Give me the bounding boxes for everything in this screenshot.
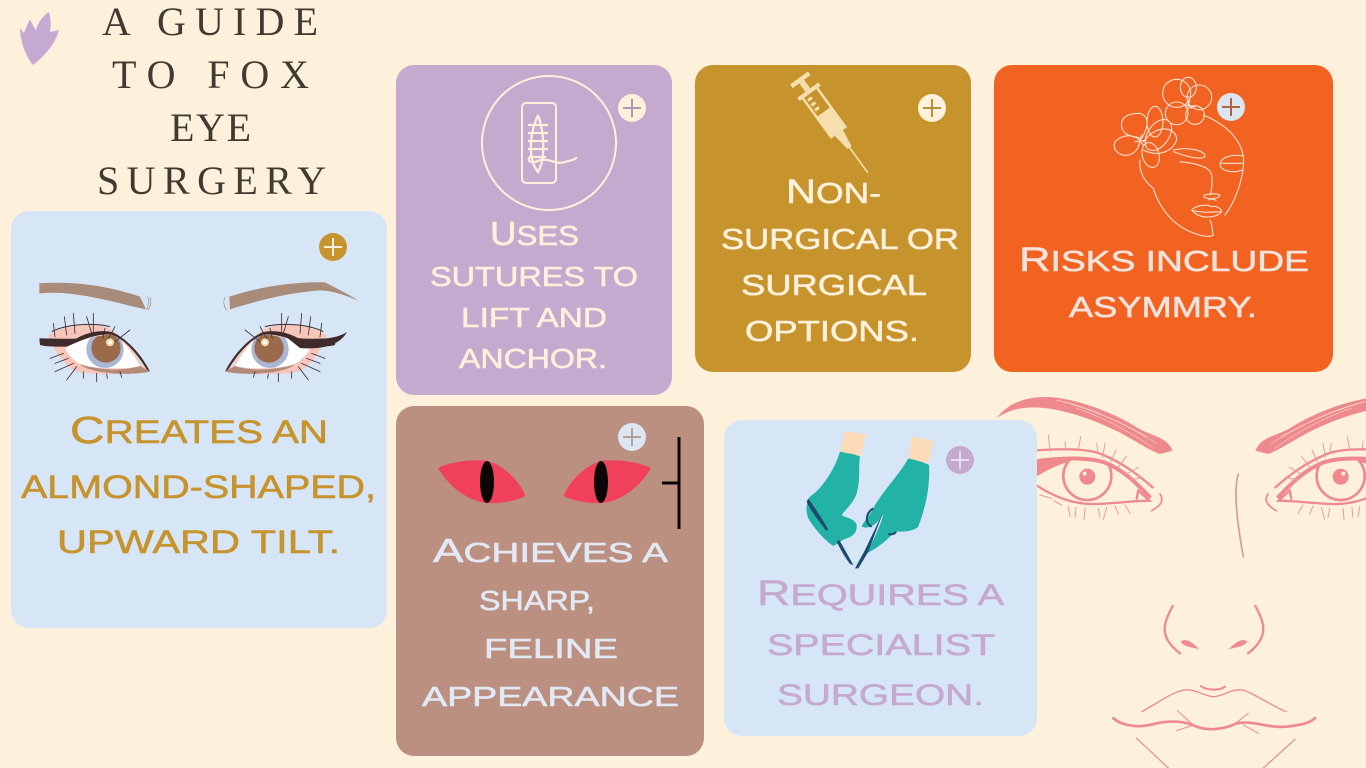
text: requires a specialist surgeon: SURGEON.: [777, 679, 984, 712]
title: SURGERY: [97, 158, 326, 203]
title: [97, 0, 326, 203]
text: uses sutures to lift and anchor: ANCHOR.: [459, 343, 607, 374]
text: requires a specialist surgeon: R EQUIRES A: [757, 574, 1004, 613]
title: EYE: [170, 105, 251, 150]
text: non-surgical or surgical options: OPTIONS.: [745, 316, 919, 348]
icon: plus button: [918, 94, 946, 122]
text: uses sutures to lift and anchor: [430, 215, 638, 374]
icon: plus button: [1217, 93, 1245, 121]
text: creates an almond-shaped, upward tilt: [21, 410, 376, 560]
text: achieves a sharp, feline appearance: SHARP,: [479, 585, 595, 616]
text: creates an almond-shaped, upward tilt: ALMOND-SHAPED,: [21, 469, 376, 505]
text: risks include asymmry: [1019, 241, 1309, 324]
panel: specialist surgeon: [724, 420, 1037, 736]
icon: red cat eyes: [438, 460, 651, 503]
text: achieves a sharp, feline appearance: APPEARANCE: [422, 681, 679, 712]
illustration: pair of eyes with winged liner: [39, 282, 358, 382]
text: achieves a sharp, feline appearance: A CHIEVES A: [433, 532, 668, 569]
panel: feline appearance: [396, 406, 704, 756]
illustration: pink line-art face: [997, 397, 1366, 768]
text: uses sutures to lift and anchor: LIFT AND: [461, 302, 607, 333]
icon: black bar mark: [662, 437, 679, 529]
panel: options: [695, 65, 971, 372]
text: non-surgical or surgical options: SURGICAL OR: [721, 224, 959, 256]
icon: syringe: [788, 70, 878, 180]
icon: gloved hands with instruments: [807, 432, 933, 568]
text: creates an almond-shaped, upward tilt: UPWARD TILT.: [57, 524, 340, 560]
text: requires a specialist surgeon: [757, 574, 1004, 712]
icon: plus button: [946, 446, 974, 474]
text: requires a specialist surgeon: SPECIALIST: [767, 629, 995, 662]
title: A GUIDE: [102, 0, 318, 44]
text: achieves a sharp, feline appearance: FELINE: [484, 633, 618, 664]
text: non-surgical or surgical options: SURGICAL: [741, 270, 927, 302]
icon: plus button: [319, 233, 347, 261]
icon: suture in circle: [482, 76, 616, 210]
text: achieves a sharp, feline appearance: [422, 532, 679, 712]
text: non-surgical or surgical options: NON-: [786, 173, 881, 211]
panel: sutures: [396, 65, 672, 395]
text: risks include asymmry: ASYMMRY.: [1069, 292, 1257, 324]
text: uses sutures to lift and anchor: USES: [490, 215, 579, 252]
text: uses sutures to lift and anchor: SUTURES TO: [430, 261, 638, 292]
text: creates an almond-shaped, upward tilt: CREATES AN: [70, 410, 328, 452]
text: risks include asymmry: RISKS INCLUDE: [1019, 241, 1309, 279]
icon: plus button: [618, 423, 646, 451]
text: non-surgical or surgical options: [721, 173, 959, 348]
icon: line-art face with flowers: [1114, 77, 1244, 236]
icon: plus button: [618, 94, 646, 122]
icon: purple leaf: [20, 12, 59, 65]
panel: almond shape: [11, 211, 387, 628]
panel: risks: [994, 65, 1333, 372]
title: TO FOX: [112, 52, 309, 97]
